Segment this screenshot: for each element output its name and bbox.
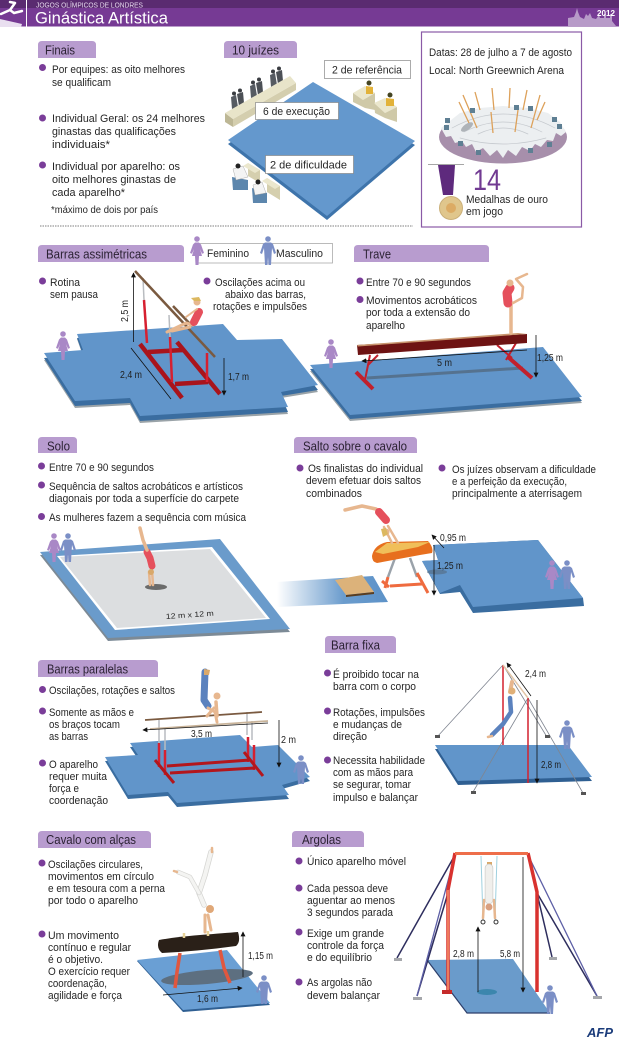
text block <box>356 277 477 332</box>
heading <box>38 245 184 262</box>
legend: gender icons <box>190 236 332 265</box>
text block: contínuo e regular <box>48 942 131 954</box>
text block: Um movimento <box>48 930 119 942</box>
dimension arrows: 1,25 m <box>437 561 463 572</box>
gymnast <box>345 506 398 543</box>
gymnast <box>174 848 214 932</box>
text: dates and venue <box>429 47 572 77</box>
text block: aguentar ao menos <box>307 895 395 907</box>
text block: As argolas não <box>307 977 372 989</box>
illustration: floor <box>40 539 290 641</box>
text block <box>38 462 247 524</box>
label: 2 de referencia <box>324 60 410 78</box>
dimension arrows: 3,5 m <box>191 729 212 740</box>
dimension arrows: 5,8 m <box>500 949 520 960</box>
icon: female <box>56 331 70 360</box>
dimension arrows: 2,8 m <box>453 949 474 960</box>
dimension arrows: 1,25 m <box>537 353 563 364</box>
text block: finais list: Individual Geral: os 24 melhores <box>52 113 205 125</box>
judges table: execution <box>225 66 296 127</box>
title: Ginástica Artística <box>35 8 169 28</box>
dimension arrows: 1,15 m <box>248 951 273 962</box>
label: 2 de referencia: 2 de referência <box>332 64 403 76</box>
text block: O exercício requer <box>48 966 130 978</box>
dimension arrows: 1,7 m <box>228 372 249 383</box>
text block: 3 segundos parada <box>307 907 394 919</box>
panel: trave <box>310 245 582 421</box>
text: judges <box>438 464 596 500</box>
illustration: gold medal <box>428 164 464 220</box>
illustration: springboard <box>335 575 374 597</box>
gymnast <box>204 669 220 722</box>
text block: as barras <box>49 731 88 743</box>
text block: finais list: ginastas das qualificações <box>52 126 176 138</box>
apparatus: high bar <box>435 665 586 795</box>
text block: finais list: Por equipes: as oito melhores <box>52 64 185 76</box>
illustration: mat <box>44 324 318 423</box>
text block: se segurar, tomar <box>333 779 411 791</box>
text: rotina: Rotina <box>50 277 81 289</box>
text: judges: Os juízes observam a dificuldade <box>452 464 596 476</box>
text block: finais list <box>39 64 205 216</box>
text: oscilacoes: Oscilações acima ou <box>215 277 305 289</box>
gymnast <box>140 528 167 590</box>
icon: male <box>293 755 309 784</box>
dimension arrows: 2,8 m <box>541 760 561 771</box>
gymnast <box>506 274 527 333</box>
heading: Barras assimétricas <box>46 246 147 262</box>
heading: Trave <box>363 246 391 262</box>
text: rotina: sem pausa <box>50 289 99 301</box>
text: oscilacoes: abaixo das barras, <box>225 289 306 301</box>
text: dates and venue: Datas: 28 de julho a 7 de agosto <box>429 47 572 59</box>
illustration: mat <box>435 745 592 785</box>
text block: finais list: oito melhores ginastas de <box>52 174 176 186</box>
dimension arrows <box>143 720 296 767</box>
illustration: mat <box>427 959 550 1013</box>
panel: barra fixa <box>324 636 592 804</box>
text block: Rotações, impulsões <box>333 707 425 719</box>
icon: London skyline 2012 <box>568 8 616 26</box>
text: gold medals: Medalhas de ouro <box>466 194 548 206</box>
dimension arrows: 5 m <box>437 358 452 369</box>
text block: É proibido tocar na <box>333 668 420 681</box>
text block: coordenação <box>49 795 108 807</box>
text block <box>324 668 425 804</box>
text block: direção <box>333 731 367 743</box>
apparatus: vault <box>372 541 432 593</box>
dimension arrows <box>163 932 273 1005</box>
heading: Finais <box>38 41 96 58</box>
label: 6 de execucao <box>256 102 338 120</box>
text block: força e <box>49 783 79 795</box>
panel: argolas <box>292 831 602 1014</box>
text: gold medals: em jogo <box>466 206 503 218</box>
panel: cavalo com alcas <box>38 831 273 1012</box>
dimension arrows <box>362 335 563 377</box>
text block: por todo o aparelho <box>48 895 138 907</box>
dimension arrows: 2,5 m <box>120 300 131 322</box>
dimension arrows <box>507 663 561 783</box>
apparatus: beam <box>356 333 532 389</box>
icon: female <box>324 339 338 368</box>
text block: com as mãos para <box>333 767 414 779</box>
text block: Sequência de saltos acrobáticos e artísticos <box>49 481 243 493</box>
text block: diagonais por toda a superfície do carpete <box>49 493 239 505</box>
text: rotina <box>39 277 99 301</box>
dimension arrows: 0,95 m <box>440 533 466 544</box>
text: judges: e a perfeição da execução, <box>452 476 567 488</box>
text: finalists <box>296 463 423 500</box>
text: finalists: combinados <box>306 488 362 500</box>
apparatus: uneven bars <box>135 271 220 398</box>
text block: aparelho <box>366 320 405 332</box>
illustration: mat <box>310 347 582 421</box>
apparatus: pommel horse <box>158 931 239 988</box>
text: oscilacoes: rotações e impulsões <box>213 301 307 313</box>
icon: gymnast on beam <box>0 2 22 27</box>
text: finalists: Os finalistas do individual <box>308 463 423 475</box>
icons: female and male <box>47 533 76 562</box>
gymnast <box>167 297 201 332</box>
text block: devem balançar <box>307 990 380 1002</box>
icon: male <box>260 236 276 265</box>
text block: O aparelho <box>49 759 98 771</box>
legend: gender icons: Masculino <box>276 248 323 260</box>
text block: finais list: individuais* <box>52 139 111 151</box>
apparatus: parallel bars <box>145 712 268 783</box>
dimension arrows: 2 m <box>281 735 296 746</box>
icon: male <box>559 720 575 749</box>
apparatus: rings frame <box>394 853 602 1000</box>
text block: Cada pessoa deve <box>307 883 388 895</box>
gymnast <box>481 862 498 924</box>
legend: gender icons: Feminino <box>207 248 249 260</box>
dimension arrows <box>120 273 249 399</box>
judges desks: reference <box>353 80 397 122</box>
text block: Oscilações, rotações e saltos <box>49 685 175 697</box>
panel: barras assimetricas <box>38 245 318 423</box>
text block: As mulheres fazem a sequência com música <box>49 512 247 524</box>
dimension arrows: 2,4 m <box>525 669 546 680</box>
judges floor <box>228 82 415 220</box>
illustration: mat <box>137 950 270 1012</box>
heading <box>292 831 364 847</box>
decorative <box>40 225 413 227</box>
text block: Único aparelho móvel <box>307 855 406 868</box>
heading: Finais: Finais <box>45 42 75 58</box>
heading: 10 juizes: 10 juízes <box>232 42 279 58</box>
dimension arrows <box>432 533 466 595</box>
text block: finais list: se qualificam <box>52 77 111 89</box>
text: finalists: devem efetuar dois saltos <box>306 475 421 487</box>
floor size label: 12 m x 12 m <box>166 609 214 621</box>
illustration: landing mat <box>422 540 584 613</box>
icon: male <box>542 985 558 1014</box>
text: dates and venue: Local: North Greewnich Arena <box>429 65 565 77</box>
text block: requer muita <box>49 771 108 783</box>
header kicker: JOGOS OLÍMPICOS DE LONDRES <box>36 0 143 10</box>
heading: Solo <box>47 438 70 454</box>
dimension arrows: 1,6 m <box>197 994 218 1005</box>
judges desks: difficulty <box>232 163 280 203</box>
heading: Barra fixa <box>331 638 381 652</box>
text block <box>39 685 175 807</box>
heading <box>354 245 489 262</box>
heading <box>38 660 158 677</box>
panel: 10 juizes <box>224 41 415 220</box>
label: 2 de dificuldade: 2 de dificuldade <box>270 160 347 172</box>
text: judges: principalmente a aterrisagem <box>452 488 582 500</box>
text block: e do equilíbrio <box>307 952 372 964</box>
label: 6 de execucao: 6 de execução <box>263 106 330 118</box>
text block: por toda a extensão do <box>366 307 470 319</box>
heading: Salto sobre o cavalo <box>303 438 407 454</box>
text block: Oscilações circulares, <box>48 859 143 871</box>
text block: finais list: cada aparelho* <box>52 187 126 199</box>
text block: e mudanças de <box>333 719 402 731</box>
text block <box>296 855 406 1002</box>
text block: barra com o corpo <box>333 681 416 693</box>
illustration: run-up track <box>277 576 388 607</box>
icon: female <box>190 236 204 265</box>
text block: Entre 70 e 90 segundos <box>366 277 471 289</box>
dimension arrows <box>453 857 523 992</box>
text block: Exige um grande <box>307 928 384 940</box>
heading <box>325 636 396 653</box>
illustration: mat <box>105 735 310 807</box>
text block: finais list: Individual por aparelho: os <box>52 161 180 173</box>
text: gold medals <box>466 194 548 218</box>
header banner <box>0 0 619 28</box>
text block: Entre 70 e 90 segundos <box>49 462 154 474</box>
big number 14: 14 <box>473 164 501 197</box>
text block: e em tesoura com a perna <box>48 883 166 895</box>
icon: male <box>256 975 272 1004</box>
text block: é o objetivo. <box>48 954 103 966</box>
dimension arrows: 2,4 m <box>120 370 142 381</box>
heading: 10 juizes <box>224 41 297 58</box>
text block: Movimentos acrobáticos <box>366 295 477 307</box>
panel: salto sobre o cavalo <box>277 437 596 613</box>
text: oscilacoes <box>204 277 307 313</box>
heading: Argolas <box>302 832 341 847</box>
text block: finais list: *máximo de dois por país <box>51 205 158 216</box>
heading: Barras paralelas <box>47 662 128 676</box>
text block: Somente as mãos e <box>49 707 134 719</box>
label: 2 de dificuldade <box>266 156 354 174</box>
text block: coordenação, <box>48 978 107 990</box>
text block: controle da força <box>307 940 385 952</box>
text block: Necessita habilidade <box>333 755 425 767</box>
panel: dates, venue and medals <box>422 32 582 227</box>
heading <box>38 437 77 454</box>
panel: barras paralelas <box>38 660 310 807</box>
heading: Cavalo com alças <box>46 832 136 847</box>
panel: solo <box>38 437 290 641</box>
illustration: arena dome <box>439 88 567 164</box>
panel: finais <box>38 41 205 216</box>
icons: female and male <box>545 560 575 589</box>
text block <box>38 859 166 1002</box>
icon: London skyline 2012: 2012 <box>597 9 616 18</box>
text block: movimentos em círculo <box>48 871 154 883</box>
gymnast <box>488 682 516 737</box>
text block: impulso e balançar <box>333 792 418 804</box>
text block: os braços tocam <box>49 719 120 731</box>
text block: agilidade e força <box>48 990 123 1002</box>
logo: AFP: AFP <box>586 1025 613 1040</box>
